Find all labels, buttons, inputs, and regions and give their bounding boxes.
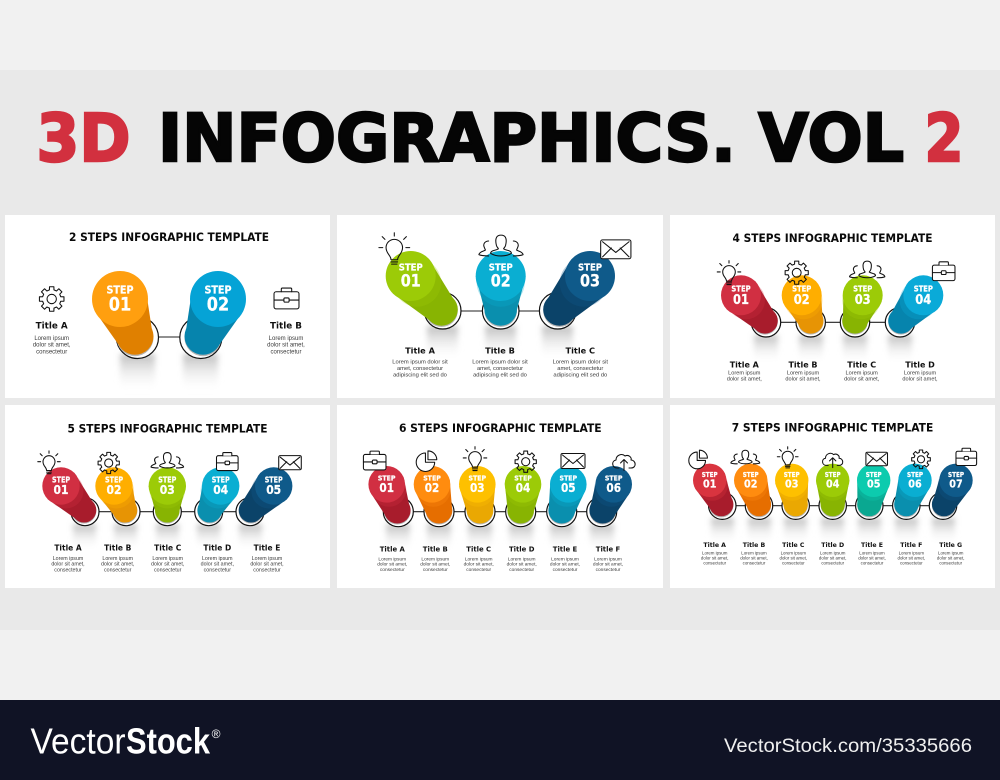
label: title C — [464, 546, 494, 573]
label: title A: Lorem ipsum — [378, 556, 406, 562]
label: title E: consectetur — [861, 561, 884, 566]
panel background — [337, 405, 663, 588]
step 01 pin — [721, 275, 781, 363]
label: title D: consectetur — [509, 567, 534, 573]
label: title A: dolor sit amet, — [701, 556, 728, 561]
step 04 pin — [885, 275, 943, 363]
step 02 pin: 02 — [425, 481, 439, 495]
panel: 7 steps — [670, 405, 995, 588]
label: title B: Lorem ipsum — [741, 551, 767, 556]
label: title D: Title D — [203, 543, 231, 552]
label: title E — [250, 543, 284, 573]
label: title F: dolor sit amet, — [593, 562, 623, 568]
step 02 pin: 02 — [744, 477, 757, 490]
label: title E: dolor sit amet, — [858, 556, 886, 561]
label: title C: dolor sit amet, — [780, 556, 807, 561]
label: title C: dolor sit amet, — [844, 377, 880, 383]
step 01 pin — [693, 464, 736, 544]
label: title B: consectetur — [423, 567, 448, 573]
step 04 pin — [816, 464, 849, 544]
label: title A: Title A — [730, 360, 760, 369]
label: title C: consectetur — [154, 567, 182, 573]
step 02 pin — [180, 271, 246, 392]
icon: envelope — [279, 456, 301, 470]
step 05 pin: STEP — [265, 475, 283, 484]
label: title F: Title F — [596, 546, 621, 554]
label: title A — [392, 345, 448, 379]
label: title B: Title B — [270, 321, 302, 331]
label: title B: dolor sit amet, — [420, 562, 450, 568]
label: title B: Title B — [423, 546, 448, 554]
step 05 pin: 05 — [561, 481, 576, 495]
heading: 7 STEPS INFOGRAPHIC TEMPLATE — [732, 422, 933, 435]
label: title A — [701, 542, 728, 566]
label: title A: dolor sit amet, — [33, 343, 71, 349]
icon: gear — [98, 452, 119, 474]
label: title D: Title D — [905, 360, 935, 369]
step 04 pin: STEP — [914, 284, 933, 294]
step 02 pin — [782, 275, 825, 363]
step 01 pin — [368, 466, 413, 552]
label: title C: Lorem ipsum — [846, 371, 878, 377]
icon: cloud upload — [823, 453, 843, 468]
label: title B: Lorem ipsum — [787, 371, 819, 377]
step 04 pin: 04 — [213, 483, 228, 497]
step 03 pin: STEP — [468, 474, 487, 483]
label: title A: consectetur — [703, 561, 727, 566]
icon: envelope — [866, 452, 888, 466]
step 02 pin: 02 — [106, 483, 122, 497]
icon: gear — [515, 451, 536, 472]
step 06 pin: STEP — [605, 474, 623, 483]
step 04 pin: STEP — [212, 475, 230, 484]
label: title B: Title B — [485, 345, 515, 355]
label: title F — [593, 546, 623, 573]
step 05 pin — [856, 464, 890, 544]
heading: 6 STEPS INFOGRAPHIC TEMPLATE — [399, 422, 602, 435]
panel background — [5, 215, 330, 398]
label: title A — [51, 543, 85, 573]
icon: gear — [785, 261, 808, 284]
label: title A: adipiscing elit sed do — [393, 373, 447, 379]
footer logo: Vector — [30, 720, 126, 761]
icon: people — [151, 453, 184, 468]
step 04 pin: STEP — [825, 471, 841, 479]
panel: 6 steps — [337, 405, 663, 588]
label: title A: dolor sit amet, — [51, 562, 85, 568]
label: title C: Lorem ipsum — [152, 556, 184, 562]
label: title A: Lorem ipsum — [53, 556, 84, 562]
step 06 pin — [893, 464, 932, 544]
step 04 pin — [505, 466, 541, 552]
footer bar — [0, 700, 1000, 780]
footer logo — [30, 720, 221, 761]
label: title E: Title E — [861, 542, 883, 549]
label: title F: consectetur — [900, 561, 923, 566]
label: title G: Title G — [939, 542, 962, 549]
label: title B: Lorem ipsum — [421, 556, 449, 562]
step 03 pin — [539, 251, 615, 360]
title: 2 — [924, 100, 964, 177]
label: title F: dolor sit amet, — [898, 556, 925, 561]
step 01 pin: STEP — [702, 471, 718, 479]
step 04 pin — [195, 467, 239, 550]
label: title G: Lorem ipsum — [938, 551, 964, 556]
panel background — [337, 215, 663, 398]
label: title D — [201, 543, 234, 573]
panel: 4 steps — [670, 215, 995, 398]
step 02 pin: STEP — [743, 471, 759, 479]
label: title C: amet, consectetur — [557, 366, 603, 372]
step 07 pin: 07 — [949, 477, 963, 490]
label: title A: consectetur — [54, 567, 82, 573]
icon: people — [479, 235, 523, 256]
panel: 5 steps — [5, 405, 330, 588]
label: title B — [420, 546, 450, 573]
step 03 pin — [775, 464, 809, 544]
label: title B — [101, 543, 134, 573]
label: title C: Lorem ipsum — [781, 551, 806, 556]
step 02 pin: STEP — [105, 475, 123, 484]
step 01 pin: 01 — [703, 477, 716, 490]
label: title B: consectetur — [743, 561, 766, 566]
label: title A: consectetur — [380, 567, 405, 573]
step 01 pin: 01 — [109, 295, 131, 316]
label: title C: Title C — [466, 546, 491, 554]
panel: 3 steps — [337, 215, 663, 398]
label: title B: dolor sit amet, — [740, 556, 768, 561]
panel background — [670, 215, 995, 398]
label: title C: Lorem ipsum dolor sit — [553, 359, 608, 365]
step 02 pin — [734, 464, 773, 544]
label: title B: Lorem ipsum dolor sit — [472, 359, 528, 365]
icon: people — [850, 261, 885, 278]
label: title D: Title D — [509, 546, 535, 554]
label: title A — [727, 360, 762, 383]
label: title A: Lorem ipsum — [34, 336, 69, 342]
connector line — [442, 310, 558, 312]
label: title E: consectetur — [253, 567, 281, 573]
icon: briefcase — [216, 453, 238, 471]
label: title A: Title A — [405, 345, 436, 355]
step 02 pin: STEP — [792, 284, 811, 294]
step 06 pin: 06 — [908, 477, 922, 490]
step 06 pin — [587, 466, 632, 552]
icon: envelope — [561, 454, 585, 468]
label: title A: dolor sit amet, — [377, 562, 407, 568]
label: title B: Title B — [788, 360, 818, 369]
label: title C: dolor sit amet, — [151, 562, 184, 568]
icon: briefcase — [956, 448, 977, 465]
step 05 pin: STEP — [866, 471, 882, 479]
label: title B — [785, 360, 821, 383]
step 03 pin: STEP — [853, 284, 872, 294]
label: title E: Title E — [254, 543, 280, 552]
icon: gear — [912, 450, 930, 469]
icon: cloud upload — [613, 455, 635, 470]
label: title C — [780, 542, 807, 566]
step 03 pin: 03 — [580, 272, 600, 291]
label: title A: Lorem ipsum — [728, 371, 761, 377]
title: INFOGRAPHICS. VOL — [158, 100, 904, 177]
step 02 pin: 02 — [207, 295, 229, 316]
connector line — [137, 336, 201, 338]
label: title E: Lorem ipsum — [551, 556, 579, 562]
label: title C — [844, 360, 880, 383]
step 03 pin: STEP — [578, 263, 602, 274]
label: title B: Title B — [743, 542, 766, 549]
step 01 pin: STEP — [731, 284, 751, 294]
label: title F: consectetur — [596, 567, 621, 573]
step 01 pin — [42, 467, 99, 550]
step 05 pin: STEP — [560, 474, 578, 483]
label: title C: Title C — [847, 360, 876, 369]
heading: 5 STEPS INFOGRAPHIC TEMPLATE — [68, 423, 268, 436]
label: title C: dolor sit amet, — [464, 562, 494, 568]
label: title D: dolor sit amet, — [902, 377, 938, 383]
label: title A — [377, 546, 407, 573]
icon: briefcase — [932, 262, 955, 281]
connector line — [85, 511, 250, 513]
label: title A: Title A — [36, 321, 68, 331]
step 05 pin — [236, 467, 292, 550]
step 03 pin: 03 — [160, 483, 175, 497]
icon: light bulb — [379, 233, 410, 264]
label: title C: consectetur — [782, 561, 805, 566]
label: title E: consectetur — [553, 567, 578, 573]
step 04 pin: 04 — [516, 481, 530, 495]
step 02 pin — [95, 467, 140, 550]
label: title C: Title C — [782, 542, 805, 549]
step 02 pin: 02 — [794, 293, 810, 308]
label: title D: Lorem ipsum — [202, 556, 233, 562]
step 01 pin — [92, 271, 158, 392]
label: title C: Lorem ipsum — [465, 556, 493, 562]
icon: light bulb — [717, 261, 741, 285]
icon: light bulb — [463, 447, 487, 471]
step 02 pin: STEP — [423, 474, 441, 483]
label: title F: Lorem ipsum — [594, 556, 622, 562]
label: title B: consectetur — [104, 567, 132, 573]
icon: light bulb — [777, 447, 798, 468]
step 03 pin: STEP — [158, 475, 177, 484]
step 05 pin: 05 — [266, 483, 281, 497]
label: title B — [740, 542, 768, 566]
step 01 pin: 01 — [379, 481, 394, 495]
label: title E — [858, 542, 886, 566]
step 01 pin: STEP — [378, 474, 396, 483]
step 04 pin: STEP — [514, 474, 532, 483]
label: title F: Lorem ipsum — [899, 551, 924, 556]
label: title A: Title A — [380, 546, 406, 554]
icon: pie chart — [689, 450, 707, 469]
label: title D: Lorem ipsum — [904, 371, 936, 377]
label: title D — [507, 546, 537, 573]
panel background — [5, 405, 330, 588]
label: title A — [33, 321, 71, 355]
label: title A: Lorem ipsum — [702, 551, 728, 556]
step 05 pin — [547, 466, 587, 552]
icon: briefcase — [363, 451, 386, 470]
step 06 pin: 06 — [606, 481, 621, 495]
step 03 pin — [149, 467, 186, 550]
panel: 2 steps — [5, 215, 330, 398]
step 03 pin: 03 — [855, 293, 871, 308]
label: title F: Title F — [900, 542, 922, 549]
label: title E: Title E — [553, 546, 578, 554]
step 03 pin: 03 — [470, 481, 485, 495]
connector line — [766, 321, 900, 323]
label: title D: Lorem ipsum — [820, 551, 846, 556]
label: title D: dolor sit amet, — [201, 562, 234, 568]
label: title B: dolor sit amet, — [267, 343, 305, 349]
title: 3D — [36, 100, 130, 177]
step 02 pin: STEP — [489, 263, 513, 274]
heading: 2 STEPS INFOGRAPHIC TEMPLATE — [69, 231, 269, 244]
label: title B — [472, 345, 528, 379]
step 02 pin — [414, 466, 454, 552]
step 01 pin: 01 — [401, 272, 421, 291]
icon: people — [731, 450, 760, 464]
step 02 pin: 02 — [491, 272, 511, 291]
label: title A: amet, consectetur — [397, 366, 443, 372]
label: title B: Lorem ipsum — [269, 336, 303, 342]
label: title D: consectetur — [821, 561, 845, 566]
icon: gear — [39, 287, 64, 311]
label: title D — [819, 542, 846, 566]
label: title B: dolor sit amet, — [785, 377, 821, 383]
step 04 pin: 04 — [826, 477, 840, 490]
step 01 pin: 01 — [733, 293, 749, 308]
step 01 pin — [386, 251, 461, 360]
label: title D: dolor sit amet, — [819, 556, 846, 561]
label: title C — [151, 543, 184, 573]
step 07 pin — [929, 464, 973, 544]
label: title D: Title D — [821, 542, 844, 549]
label: title E: dolor sit amet, — [250, 562, 284, 568]
label: title C — [553, 345, 608, 379]
footer logo: ® — [212, 727, 221, 741]
step 01 pin: STEP — [399, 263, 423, 274]
label: title E: dolor sit amet, — [550, 562, 580, 568]
footer image id: VectorStock.com/35335666 — [724, 735, 972, 757]
label: title C: adipiscing elit sed do — [553, 373, 607, 379]
label: title B: dolor sit amet, — [101, 562, 134, 568]
step 02 pin: STEP — [204, 283, 232, 296]
label: title E — [550, 546, 580, 573]
label: title B: adipiscing elit sed do — [473, 373, 527, 379]
label: title A: Lorem ipsum dolor sit — [392, 359, 448, 365]
label: title D: dolor sit amet, — [507, 562, 537, 568]
label: title E: Lorem ipsum — [252, 556, 283, 562]
step 03 pin — [840, 275, 883, 363]
step 02 pin — [476, 251, 526, 360]
label: title B: Title B — [104, 543, 132, 552]
icon: light bulb — [38, 451, 60, 474]
step 01 pin: STEP — [106, 283, 134, 296]
label: title D: Lorem ipsum — [508, 556, 536, 562]
label: title A: Title A — [703, 542, 726, 549]
panel background — [670, 405, 995, 588]
step 07 pin: STEP — [948, 471, 964, 479]
label: title D: consectetur — [204, 567, 231, 573]
step 04 pin: 04 — [915, 293, 931, 308]
connector line — [722, 505, 943, 507]
step 03 pin: 03 — [785, 477, 798, 490]
step 01 pin: 01 — [54, 483, 68, 497]
icon: pie chart — [416, 451, 437, 472]
label: title B: consectetur — [270, 349, 302, 355]
label: title E: Lorem ipsum — [859, 551, 885, 556]
label: title D — [902, 360, 938, 383]
label: title G: dolor sit amet, — [937, 556, 964, 561]
label: title C: consectetur — [466, 567, 491, 573]
heading: 4 STEPS INFOGRAPHIC TEMPLATE — [732, 232, 932, 245]
step 03 pin: STEP — [784, 471, 800, 479]
step 05 pin: 05 — [867, 477, 880, 490]
label: title B — [267, 321, 305, 355]
icon: envelope — [601, 240, 631, 259]
label: title B: amet, consectetur — [477, 366, 523, 372]
step 06 pin: STEP — [907, 471, 923, 479]
label: title A: dolor sit amet, — [727, 377, 762, 383]
label: title A: Title A — [54, 543, 82, 552]
label: title C: Title C — [566, 345, 595, 355]
connector line — [398, 511, 602, 513]
label: title G — [937, 542, 964, 566]
footer logo: Stock — [126, 720, 211, 761]
step 03 pin — [459, 466, 496, 552]
label: title G: consectetur — [939, 561, 963, 566]
icon: briefcase — [274, 288, 299, 309]
label: title B: Lorem ipsum — [102, 556, 134, 562]
step 01 pin: STEP — [52, 475, 70, 484]
label: title A: consectetur — [36, 349, 67, 355]
label: title C: Title C — [154, 543, 182, 552]
label: title F — [898, 542, 925, 566]
